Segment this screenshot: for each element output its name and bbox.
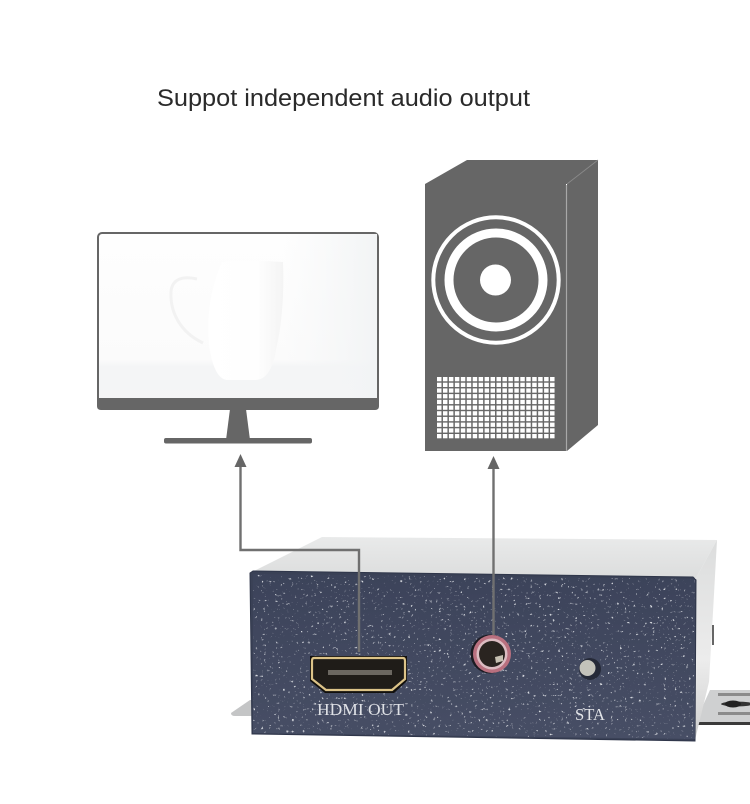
title: Suppot independent audio output [157, 85, 530, 112]
arrow: audio to speaker [488, 456, 500, 635]
panel speckle [250, 570, 698, 742]
device left flange [231, 700, 256, 716]
icon: monitor [97, 233, 379, 444]
device: video box [231, 537, 750, 742]
device top face [252, 537, 717, 578]
device side face [695, 540, 717, 740]
speaker front face [425, 184, 566, 451]
icon: speaker [425, 160, 598, 451]
monitor bottom bezel [97, 398, 379, 410]
monitor stand [226, 409, 250, 440]
arrow: HDMI to monitor [234, 454, 359, 652]
speaker centre [480, 264, 511, 296]
HDMI label: HDMI OUT [317, 700, 405, 719]
monitor screen [98, 233, 378, 409]
device right flange [695, 690, 750, 725]
device front panel [250, 571, 696, 741]
speaker outer ring [433, 217, 559, 343]
STA label: STA [575, 705, 606, 724]
speaker inner ring [449, 233, 543, 327]
speaker top face [425, 160, 598, 184]
mug image on screen [171, 261, 283, 380]
HDMI port [310, 656, 407, 693]
audio jack [470, 634, 511, 674]
monitor base [164, 438, 312, 444]
speaker grille [437, 377, 556, 439]
speaker side face [567, 160, 598, 451]
status LED [579, 658, 601, 680]
